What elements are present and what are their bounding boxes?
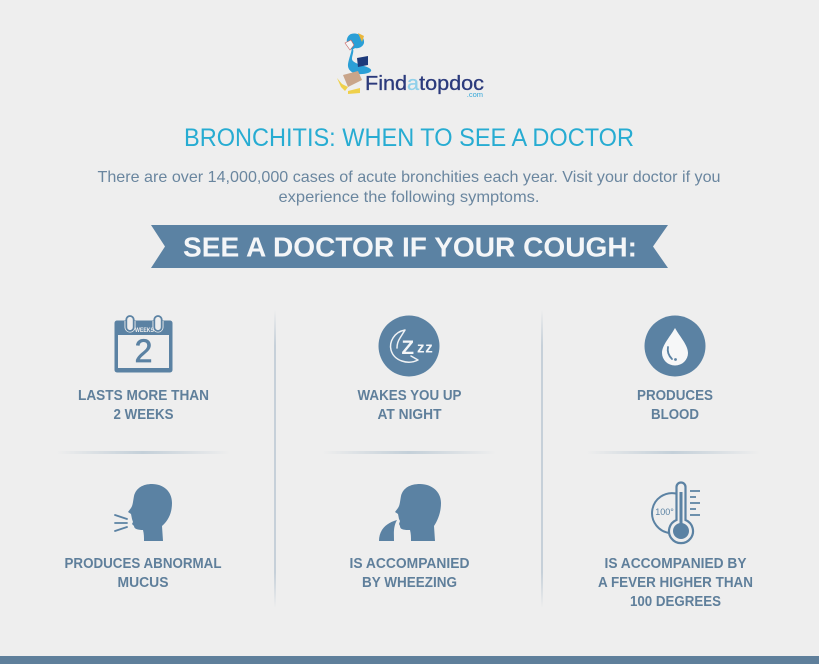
label: PRODUCES ABNORMAL [64, 556, 222, 572]
icon: thermometer [652, 482, 700, 543]
label: BLOOD [651, 407, 699, 423]
intro text [98, 169, 720, 206]
title: BRONCHITIS: WHEN TO SEE A DOCTOR [184, 124, 634, 152]
logo wordmark: Findatopdoc [365, 72, 484, 95]
label: A FEVER HIGHER THAN [598, 575, 753, 591]
intro text: experience the following symptoms. [278, 189, 540, 206]
label: IS ACCOMPANIED [350, 556, 470, 572]
icon: moon and zzz [378, 316, 440, 376]
item: produces abnormal mucus [64, 484, 222, 591]
item: accompanied by wheezing [350, 484, 470, 591]
label: PRODUCES [637, 388, 713, 404]
label: IS ACCOMPANIED BY [604, 556, 747, 572]
logo .com: .com [467, 90, 483, 99]
column dividers [274, 310, 543, 608]
label: AT NIGHT [378, 407, 442, 423]
icon: calendar [114, 316, 172, 372]
item: fever higher than 100 degrees [598, 482, 753, 610]
logo: Findatopdoc [337, 33, 484, 99]
icon: head with breath [379, 484, 441, 541]
icon: mascot bird [337, 33, 371, 94]
icon: drop [644, 316, 706, 376]
icon: calendar: WEEKS [135, 327, 155, 334]
icon: head with cough lines [115, 484, 172, 541]
label: WAKES YOU UP [358, 388, 462, 404]
icon: calendar: 2 [135, 333, 152, 369]
label: LASTS MORE THAN [78, 388, 209, 404]
label: 100 DEGREES [630, 594, 721, 610]
item: produces blood [637, 316, 713, 423]
label: 2 WEEKS [114, 407, 174, 423]
icon: thermometer: 100° [655, 507, 674, 517]
item: wakes you up at night [358, 316, 462, 423]
banner [151, 225, 668, 268]
item: lasts more than 2 weeks [78, 316, 209, 423]
row dividers [56, 451, 760, 454]
intro text: There are over 14,000,000 cases of acute bronchities each year. Visit your doctor if you [98, 169, 720, 186]
label: BY WHEEZING [362, 575, 457, 591]
icon: moon and zzz: z [425, 339, 433, 356]
icon: moon and zzz: Z [402, 338, 414, 359]
banner text: SEE A DOCTOR IF YOUR COUGH: [183, 232, 637, 262]
label: MUCUS [118, 575, 169, 591]
footer bar [0, 656, 819, 664]
icon: moon and zzz: z [417, 339, 424, 356]
